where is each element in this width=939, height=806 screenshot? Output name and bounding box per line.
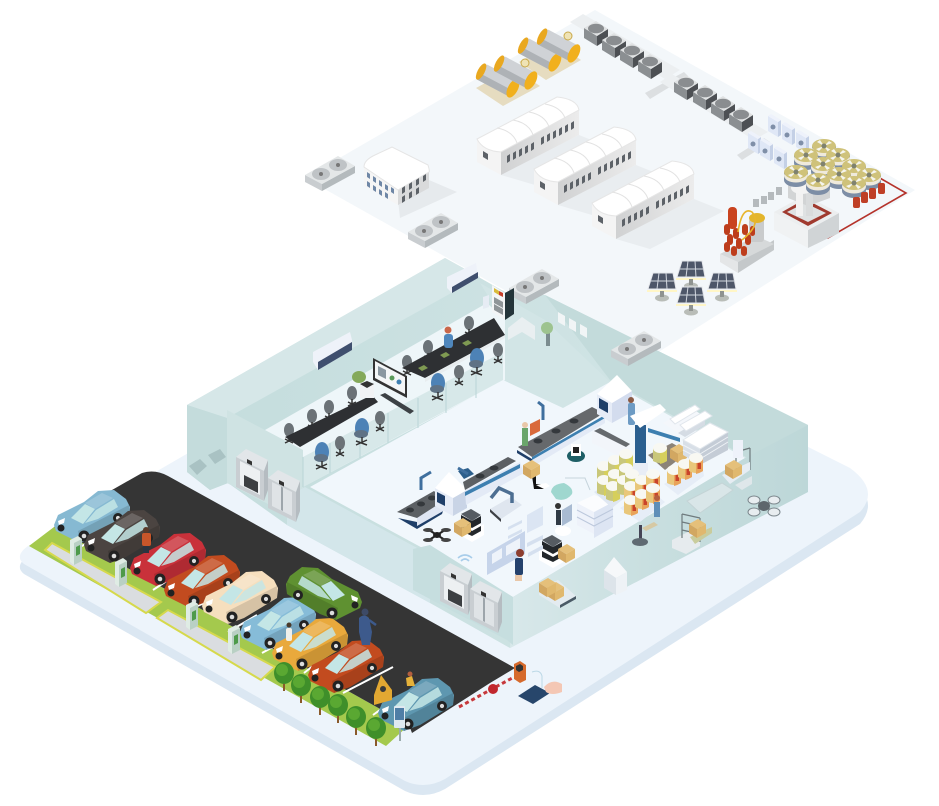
back walls (187, 258, 808, 648)
small grey containers (753, 187, 782, 207)
grey ducts (189, 449, 226, 475)
back room (480, 283, 610, 408)
parked cars (54, 490, 454, 731)
wall air conditioner left (313, 332, 352, 370)
woman at panels (515, 549, 524, 581)
engineer at machine (628, 397, 635, 425)
worker at pallets (654, 495, 660, 517)
gate control and scanner (514, 661, 562, 704)
white stacked shelves (577, 495, 613, 538)
sack pallets (594, 449, 704, 522)
front glass right (510, 425, 808, 648)
round teal robot (567, 444, 585, 462)
pallet two (620, 469, 665, 522)
parking area (29, 472, 515, 746)
base platform (20, 283, 868, 795)
drone: grey (748, 496, 780, 516)
fuel tanks (473, 26, 583, 106)
asphalt (54, 472, 515, 733)
roof unit (408, 213, 458, 248)
wall screen (373, 358, 407, 398)
pallet three (664, 453, 704, 495)
main factory floor (310, 380, 745, 597)
circular gold storage tanks (794, 139, 881, 198)
front wall elevators (413, 545, 513, 645)
white delivery vehicle (672, 514, 712, 554)
operator and red panel (522, 419, 540, 446)
office glass partition (303, 352, 503, 487)
roof units (305, 156, 355, 191)
small office building (364, 147, 457, 218)
wifi signal icon (458, 555, 472, 561)
conveyor B (458, 457, 524, 505)
front wall left (287, 487, 430, 603)
floor cabinet (604, 557, 627, 595)
elevator wall (227, 410, 303, 522)
tall goods cart (722, 440, 752, 490)
loading pad (687, 483, 733, 513)
production line (397, 375, 635, 529)
solar panels (647, 261, 737, 316)
digital twin hologram (551, 478, 590, 500)
wall top strip (187, 258, 480, 418)
chiller rows (570, 14, 770, 160)
technician at screen (555, 503, 572, 536)
red reactor cluster (720, 207, 774, 273)
warning sign (374, 675, 392, 705)
concrete treatment tank (774, 165, 839, 248)
pallet one (594, 449, 642, 508)
plant and printer (352, 371, 374, 398)
roof unit on wall top (509, 269, 559, 304)
picking robot (632, 522, 658, 546)
robot arms (421, 402, 543, 490)
wall air conditioner right (447, 263, 478, 293)
drone: black (423, 528, 451, 542)
roadside trees (274, 662, 386, 746)
dark bench (380, 393, 414, 414)
storage shelves (483, 285, 514, 320)
office desk row right (402, 316, 505, 400)
mobile delivery robots (454, 460, 575, 568)
utility yard (305, 14, 770, 249)
green strip (29, 527, 409, 746)
red drums (853, 183, 885, 208)
elevators: factory side (440, 563, 502, 633)
office desk row left (284, 386, 385, 469)
wall band right (545, 295, 808, 492)
conveyor C (517, 407, 605, 467)
electrical cabinets (748, 114, 809, 169)
sofa and plant (508, 317, 553, 346)
barrier arm (459, 677, 514, 707)
machine tunnel (435, 472, 467, 516)
people in lot (142, 527, 415, 686)
pallet cart (539, 578, 577, 608)
parking sign (394, 706, 405, 741)
left wall block (187, 405, 228, 490)
elevators: office side (236, 449, 300, 522)
parking lines (78, 539, 393, 715)
roof unit lower right (611, 331, 661, 366)
glass building shell (187, 258, 808, 648)
conveyor A (397, 491, 445, 529)
stacked white beds (663, 405, 728, 465)
holographic panels (487, 506, 543, 575)
outdoor utility yard slab (305, 10, 915, 365)
warehouse halls (477, 97, 724, 249)
red perimeter pipe (825, 177, 906, 238)
office floor (265, 303, 505, 487)
EV chargers (70, 536, 240, 654)
tracked robot arm (490, 488, 522, 522)
end machine (597, 375, 632, 423)
palletizing gantry (592, 404, 688, 480)
seated worker (444, 326, 453, 348)
charging pads (45, 543, 275, 680)
wall pictures (558, 312, 587, 338)
